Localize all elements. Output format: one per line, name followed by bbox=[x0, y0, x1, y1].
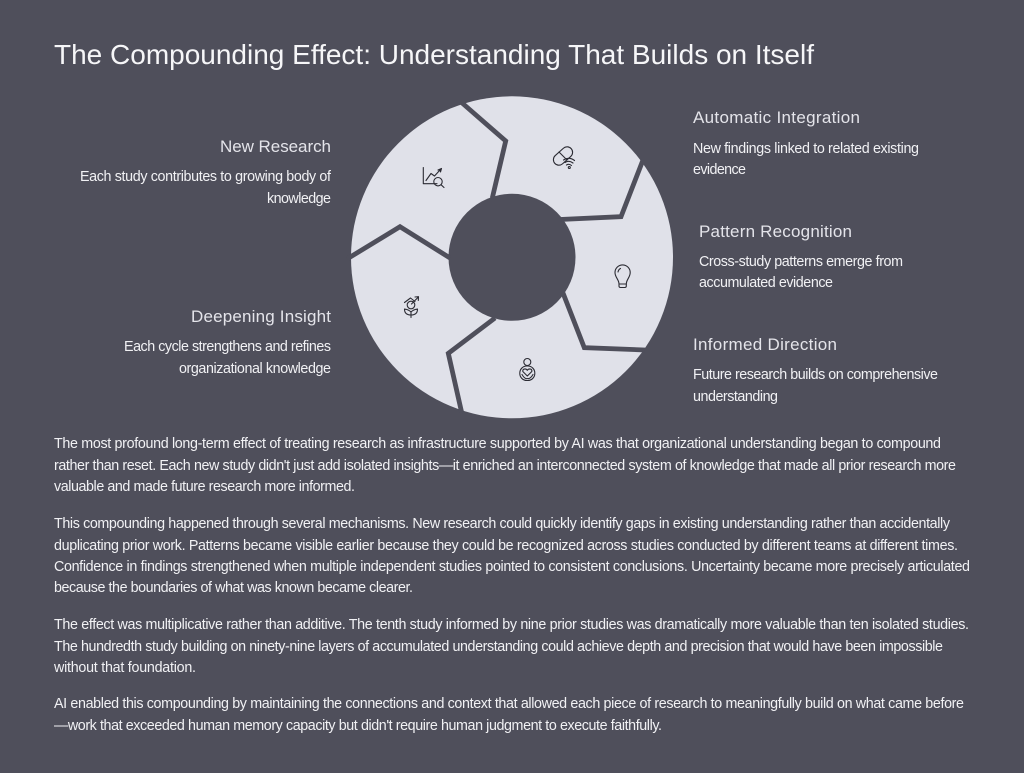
title: The Compounding Effect: Understanding That Builds on Itself bbox=[54, 39, 814, 70]
paragraph 2 bbox=[54, 516, 970, 596]
label: Informed Direction: Future research builds on comprehensive bbox=[693, 367, 938, 383]
label: New Research: Each study contributes to growing body of bbox=[80, 169, 331, 185]
label: Informed Direction bbox=[693, 335, 938, 405]
paragraph 4 bbox=[54, 696, 964, 734]
label: Automatic Integration: Automatic Integration bbox=[693, 108, 860, 127]
icon: capsule with signal bbox=[551, 145, 575, 168]
label: Deepening Insight bbox=[124, 307, 331, 377]
paragraph 3: The hundredth study building on ninety-nine layers of accumulated understanding could achieve depth and precision that would have been impossible bbox=[54, 639, 943, 655]
paragraph 1: The most profound long-term effect of treating research as infrastructure supported by AI was that organizational understanding began to compound bbox=[54, 436, 941, 452]
outer ring bbox=[351, 96, 673, 418]
paragraph 4: AI enabled this compounding by maintaining the connections and context that allowed each piece of research to meaningfully build on what came before bbox=[54, 696, 964, 712]
label: Deepening Insight: Each cycle strengthens and refines bbox=[124, 339, 331, 355]
label: Pattern Recognition: Cross-study patterns emerge from bbox=[699, 254, 903, 270]
icon: growth plant with coin bbox=[404, 297, 418, 318]
label: Pattern Recognition: accumulated evidence bbox=[699, 275, 833, 291]
label: Automatic Integration: New findings linked to related existing bbox=[693, 141, 919, 157]
icon: person with heart bbox=[520, 358, 535, 380]
paragraph 3: without that foundation. bbox=[53, 660, 196, 676]
label: New Research: New Research bbox=[220, 137, 331, 156]
label: Informed Direction: Informed Direction bbox=[693, 335, 837, 354]
label: Automatic Integration bbox=[693, 108, 919, 178]
center hole bbox=[448, 194, 576, 321]
label: New Research: knowledge bbox=[267, 191, 331, 207]
paragraph 2: duplicating prior work. Patterns became visible earlier because they could be recognized across studies conducted by different teams at different times. bbox=[54, 538, 958, 554]
label: Informed Direction: understanding bbox=[693, 389, 778, 405]
label: New Research bbox=[80, 137, 331, 207]
paragraph 2: This compounding happened through several mechanisms. New research could quickly identify gaps in existing understanding rather than accidentally bbox=[54, 516, 951, 532]
paragraph 2: Confidence in findings strengthened when multiple independent studies pointed to consistent conclusions. Uncertainty became more precisely articulated bbox=[54, 559, 970, 575]
paragraph 1 bbox=[54, 436, 956, 495]
cycle diagram bbox=[347, 96, 673, 418]
label: Deepening Insight: Deepening Insight bbox=[191, 307, 331, 326]
icon: chart with magnifier bbox=[423, 168, 444, 188]
segment separators bbox=[347, 102, 645, 414]
label: Deepening Insight: organizational knowledge bbox=[179, 361, 331, 377]
paragraph 3 bbox=[53, 617, 969, 676]
paragraph 3: The effect was multiplicative rather than additive. The tenth study informed by nine prior studies was dramatically more valuable than ten isolated studies. bbox=[54, 617, 969, 633]
icon: light bulb bbox=[615, 265, 630, 288]
paragraph 1: valuable and made future research more informed. bbox=[54, 479, 355, 495]
label: Automatic Integration: evidence bbox=[693, 162, 746, 178]
paragraph 2: because the boundaries of what was known became clearer. bbox=[54, 580, 413, 596]
paragraph 4: —work that exceeded human memory capacity but didn't require human judgment to execute faithfully. bbox=[54, 718, 662, 734]
label: Pattern Recognition bbox=[699, 222, 903, 291]
label: Pattern Recognition: Pattern Recognition bbox=[699, 222, 852, 241]
paragraph 1: rather than reset. Each new study didn't just add isolated insights—it enriched an interconnected system of knowledge that made all prior research more bbox=[54, 458, 956, 474]
